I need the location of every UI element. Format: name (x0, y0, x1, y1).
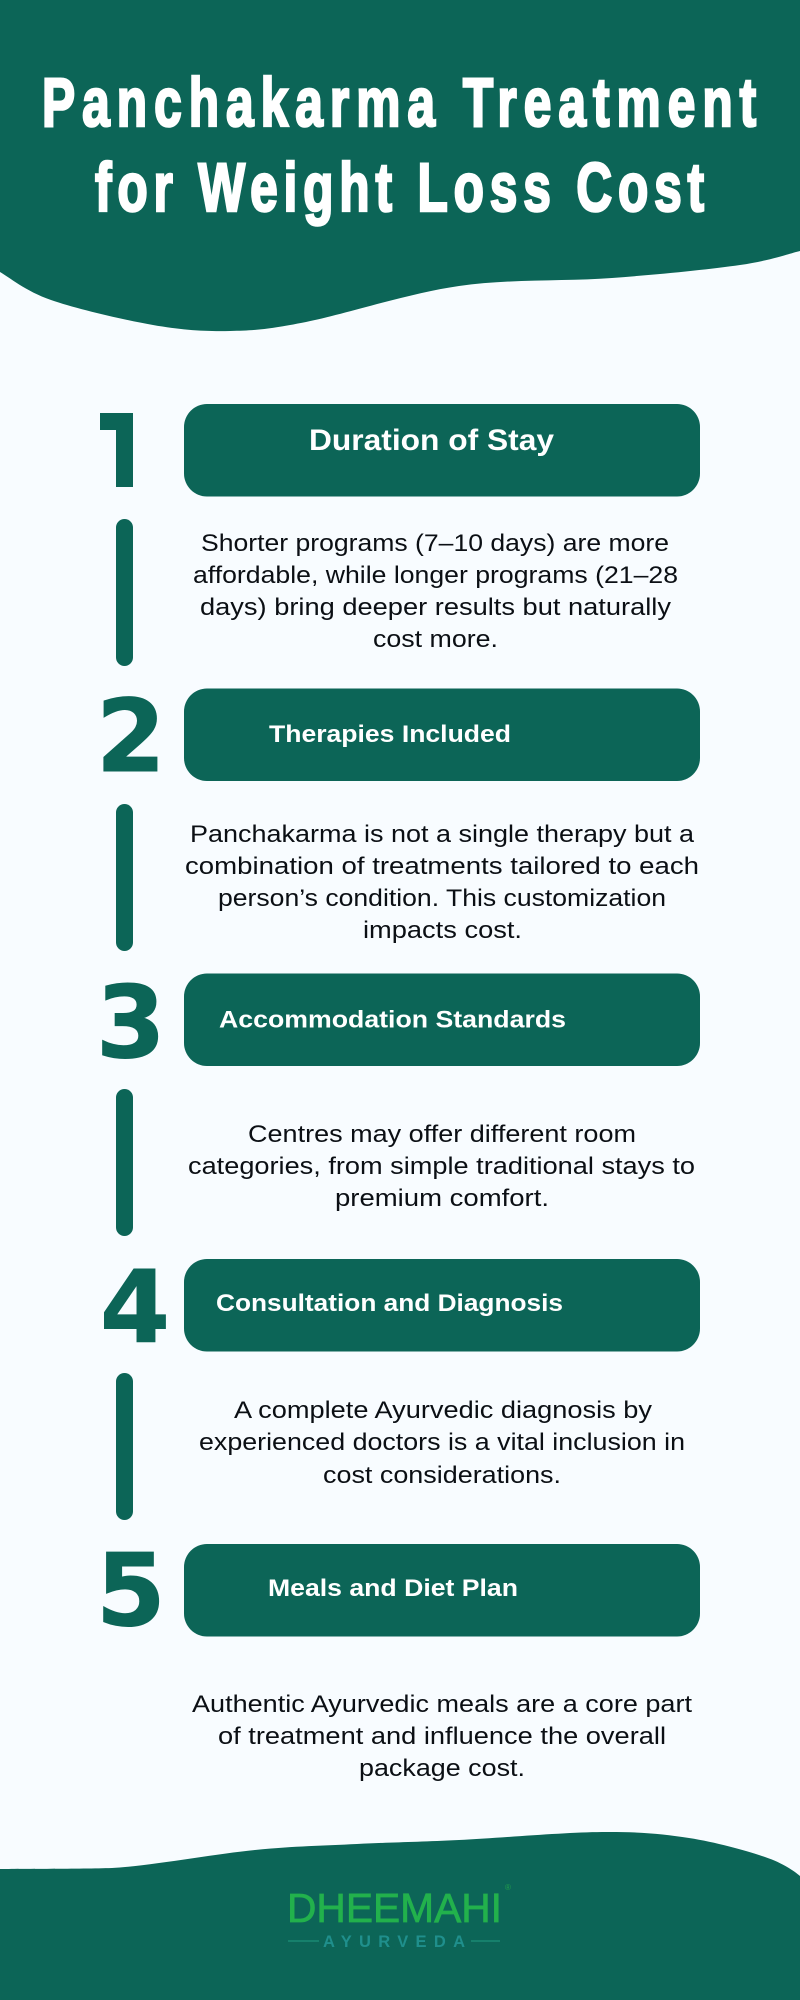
step 2 description: person’s condition. This customization (218, 885, 666, 912)
step 4 description: A complete Ayurvedic diagnosis by (234, 1397, 653, 1424)
step 5 description: package cost. (359, 1755, 525, 1782)
step 1 description: affordable, while longer programs (21–28 (193, 562, 678, 589)
step 1 heading box: Duration of Stay (309, 424, 554, 457)
title: Panchakarma Treatment (42, 64, 756, 141)
step 4 heading box (184, 1259, 700, 1352)
footer logo (287, 1883, 511, 1951)
step 5 heading box (184, 1544, 700, 1636)
step 3 number: 3 (96, 964, 166, 1081)
footer wave banner (0, 1832, 800, 2000)
step 5 description: of treatment and influence the overall (218, 1723, 666, 1750)
footer logo: ® (505, 1883, 511, 1892)
step 3 description (188, 1121, 695, 1212)
step 1 description: days) bring deeper results but naturally (200, 594, 672, 621)
step 5 number: 5 (96, 1532, 166, 1649)
step 3 heading box (184, 974, 700, 1066)
step 2 description: impacts cost. (363, 917, 522, 944)
footer logo: AYURVEDA (323, 1933, 465, 1951)
title: for Weight Loss Cost (95, 149, 704, 226)
step 1 connector bar (116, 519, 133, 666)
step 2 heading box (184, 688, 700, 781)
step 3 description: premium comfort. (335, 1185, 549, 1212)
step 5 description (192, 1691, 692, 1782)
step 3 connector bar (116, 1089, 133, 1236)
step 4 heading box: Consultation and Diagnosis (216, 1290, 563, 1317)
step 5 heading box: Meals and Diet Plan (268, 1575, 518, 1602)
step 4 number: 4 (100, 1249, 170, 1366)
step 2 description: combination of treatments tailored to each (185, 853, 699, 880)
step 3 description: categories, from simple traditional stays to (188, 1153, 695, 1180)
header wave banner (0, 0, 800, 331)
step 2 description (185, 821, 699, 944)
step 2 number: 2 (96, 678, 166, 795)
step 1 number: 1 (89, 394, 159, 511)
step 1 number (100, 413, 133, 487)
step 1 heading box (184, 404, 700, 496)
footer logo: DHEEMAHI (287, 1885, 502, 1931)
title (42, 64, 756, 226)
step 1 description (193, 530, 678, 653)
step 1 description: Shorter programs (7–10 days) are more (201, 530, 669, 557)
step 2 heading box: Therapies Included (269, 721, 511, 748)
step 4 description: cost considerations. (323, 1462, 561, 1489)
step 4 description (199, 1397, 685, 1489)
step 1 description: cost more. (373, 626, 498, 653)
step 3 heading box: Accommodation Standards (219, 1006, 566, 1034)
step 2 connector bar (116, 804, 133, 951)
step 5 description: Authentic Ayurvedic meals are a core part (192, 1691, 692, 1718)
step 4 description: experienced doctors is a vital inclusion in (199, 1429, 685, 1456)
step 4 connector bar (116, 1373, 133, 1520)
step 2 description: Panchakarma is not a single therapy but a (190, 821, 694, 848)
step 3 description: Centres may offer different room (248, 1121, 636, 1148)
